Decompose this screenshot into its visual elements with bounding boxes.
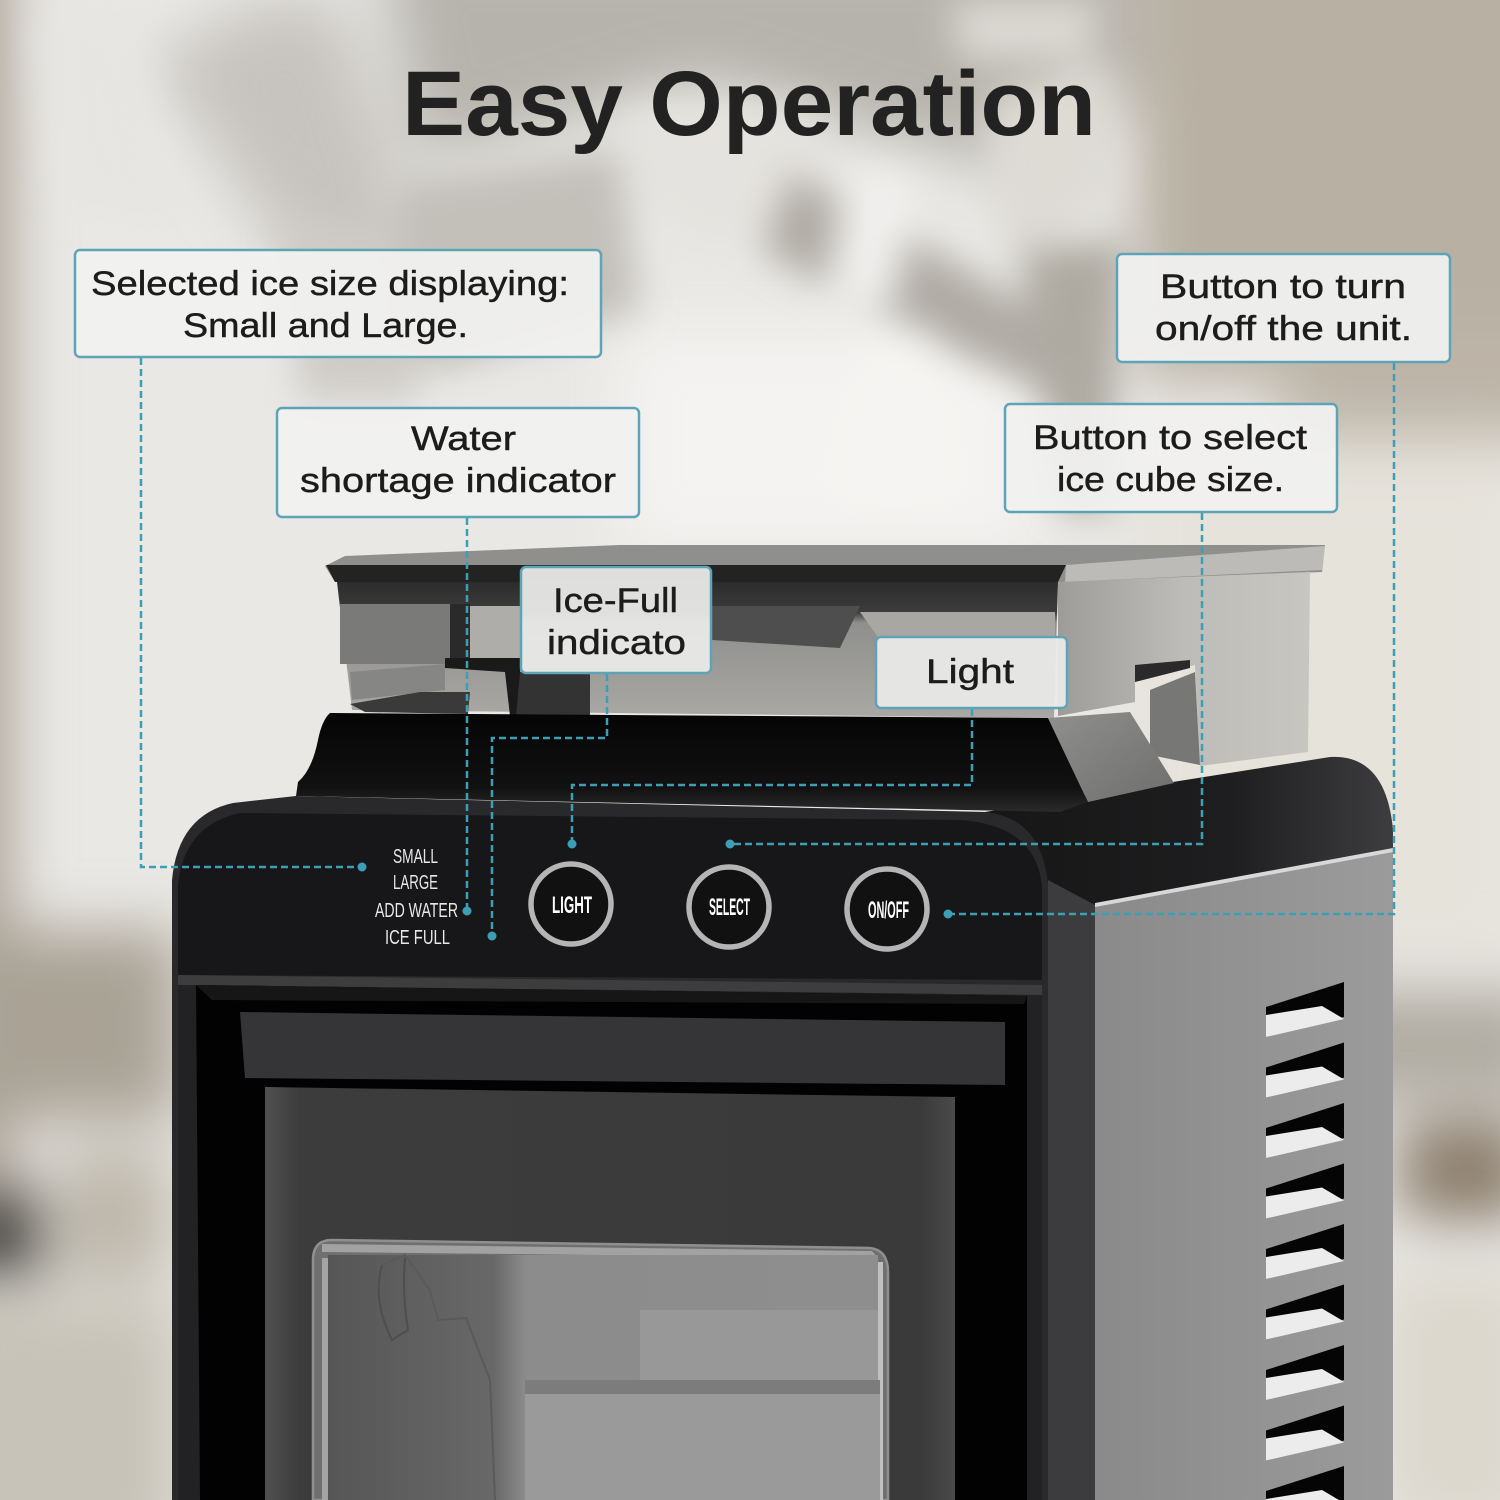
connector end dots: [358, 840, 952, 940]
stand: [296, 712, 1174, 812]
button: select: SELECT: [709, 894, 750, 921]
title: Easy Operation: [402, 53, 1096, 155]
tray body: [337, 572, 1310, 766]
callout: on/off: Button to turn: [1160, 268, 1406, 306]
panel labels: LARGE: [393, 872, 438, 894]
callout: light: Light: [926, 653, 1015, 691]
callout: water shortage: Water: [411, 420, 516, 458]
panel labels: SMALL: [393, 846, 438, 868]
button: on/off: [847, 869, 927, 949]
button: on/off: ON/OFF: [868, 897, 909, 924]
callout: select size: ice cube size.: [1057, 461, 1284, 499]
button: light: LIGHT: [552, 892, 592, 919]
panel labels: ADD WATER: [375, 900, 458, 922]
callout: on/off: [1117, 254, 1450, 362]
callout: water shortage: [277, 408, 639, 517]
callout: selected ice size: Small and Large.: [183, 307, 468, 345]
panel labels: [375, 846, 458, 949]
callout: selected ice size: [75, 250, 601, 357]
button: light: [531, 864, 611, 944]
callout: selected ice size: Selected ice size displaying:: [91, 265, 569, 303]
ice maker product: [172, 545, 1393, 1500]
button: select: [689, 867, 769, 947]
callout: light: [876, 637, 1067, 708]
callout: water shortage: shortage indicator: [300, 462, 616, 500]
viewing window: [313, 1240, 888, 1500]
callout: select size: Button to select: [1033, 419, 1308, 457]
ice compartment recess: [178, 985, 1042, 1500]
callout: select size: [1005, 404, 1337, 512]
callout: ice-full: Ice-Full: [553, 582, 678, 620]
callout: ice-full: [521, 567, 711, 673]
tray lid: [325, 545, 1325, 582]
callout: ice-full: indicato: [547, 624, 686, 662]
vents: [1266, 982, 1344, 1500]
callout connector lines: [141, 358, 1394, 934]
callout: on/off: on/off the unit.: [1155, 310, 1412, 348]
panel labels: ICE FULL: [385, 927, 450, 949]
unit side: [985, 757, 1393, 1500]
front control panel: [172, 796, 1048, 1500]
